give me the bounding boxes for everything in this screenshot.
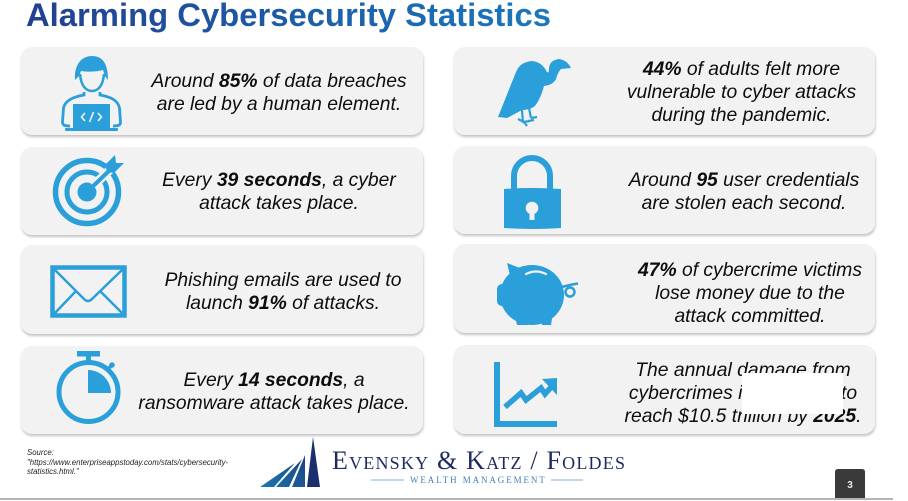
logo tagline: WEALTH MANAGEMENT (410, 475, 547, 485)
icon: rising line chart (494, 362, 557, 427)
stat text: reach $10.5 trillion by 2025. (625, 406, 861, 427)
logo mark (260, 437, 320, 487)
logo: Evensky & Katz / Foldes (260, 437, 626, 487)
page number (835, 469, 865, 498)
stat text: during the pandemic. (651, 105, 832, 126)
source note: Source: (27, 448, 54, 457)
stat text: attack takes place. (199, 193, 359, 214)
panel: cyber attack frequency (21, 147, 423, 235)
stat text: attack committed. (674, 306, 826, 327)
white redaction block (742, 373, 843, 414)
panel: ransomware (21, 346, 423, 434)
stat text: Every 39 seconds, a cyber (162, 170, 396, 191)
icon: envelope (52, 268, 124, 316)
stat text: 44% of adults felt more (643, 59, 840, 80)
icon: piggy bank (497, 263, 578, 325)
logo wordmark: Evensky & Katz / Foldes (332, 446, 626, 475)
stat text: cybercrimes is expected to (629, 383, 857, 404)
icon: person at laptop (62, 56, 120, 131)
page number: 3 (847, 480, 853, 491)
panel: human element (21, 47, 423, 135)
stat text: Around 85% of data breaches (151, 71, 407, 92)
stat text: Around 95 user credentials (629, 170, 859, 191)
icon: target with arrow (56, 155, 124, 224)
stat text: launch 91% of attacks. (186, 293, 380, 314)
stat text: Every 14 seconds, a (183, 370, 365, 391)
source note: statistics.html." (27, 467, 80, 476)
panel: financial loss (454, 244, 875, 333)
stat text: vulnerable to cyber attacks (627, 82, 857, 103)
panel: pandemic vulnerability (454, 47, 875, 135)
stat text: are stolen each second. (642, 193, 846, 214)
stat text: are led by a human element. (157, 94, 401, 115)
icon: vulture (498, 59, 571, 126)
panel: phishing (21, 245, 423, 334)
source note: "https://www.enterpriseappstoday.com/stats/cybersecurity- (27, 458, 228, 467)
panel: annual damage (454, 345, 875, 434)
icon: padlock (504, 158, 561, 229)
panel: stolen credentials (454, 146, 875, 234)
stat text: ransomware attack takes place. (138, 393, 410, 414)
stat text: Phishing emails are used to (165, 270, 401, 291)
stat text: 47% of cybercrime victims (638, 260, 862, 281)
stat text: lose money due to the (655, 283, 845, 304)
icon: stopwatch (59, 351, 118, 422)
stat text: The annual damage from (635, 360, 851, 381)
